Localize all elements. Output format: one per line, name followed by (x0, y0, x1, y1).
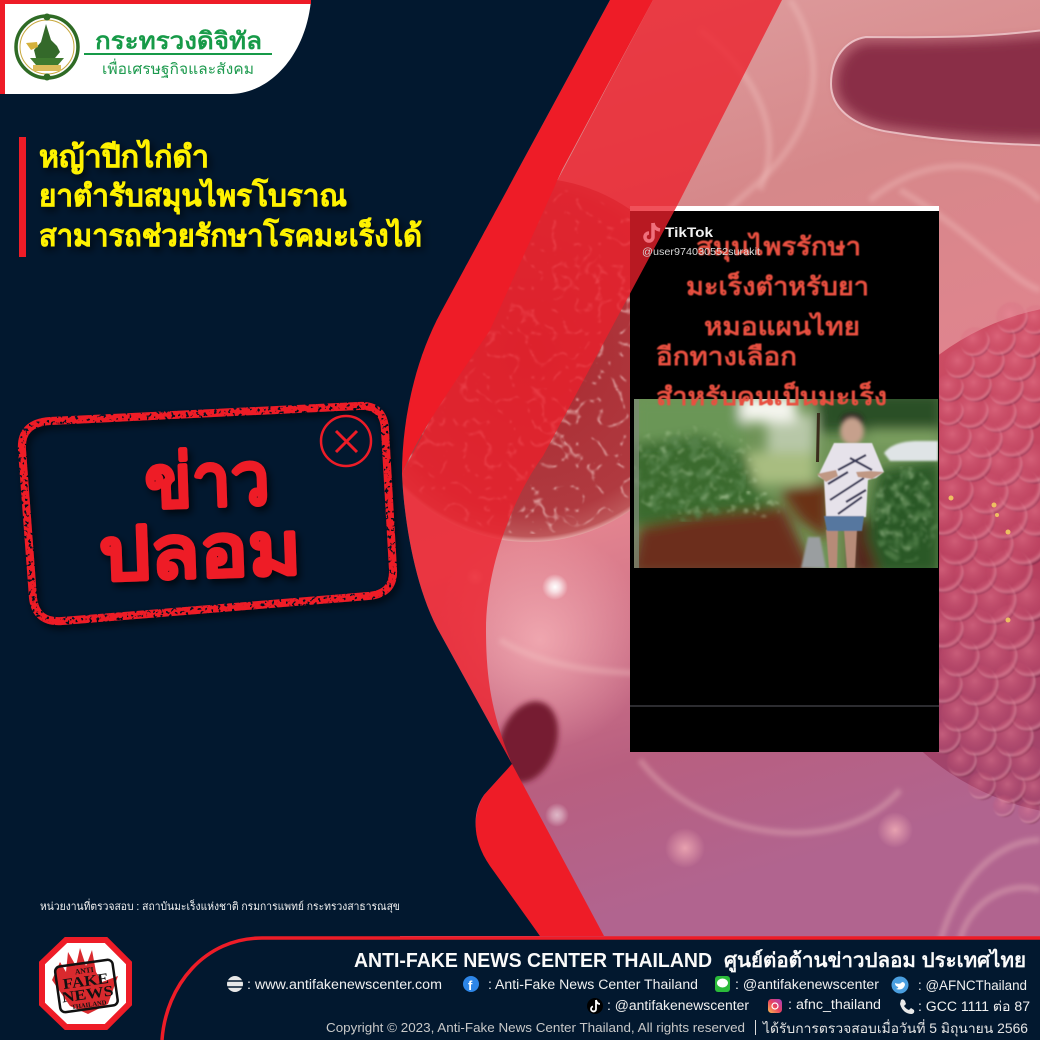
panel: TikTok post screenshot (620, 206, 943, 752)
icon: globe (227, 976, 243, 992)
icon: tiktok (587, 998, 603, 1014)
footer contact rows: : @antifakenewscenter (607, 998, 750, 1013)
TikTok watermark (642, 223, 760, 258)
footer contact rows: : www.antifakenewscenter.com (247, 977, 442, 992)
icon: facebook: f (468, 978, 473, 993)
dark side panel (0, 0, 610, 936)
post text: สมุนไพรรักษา (696, 231, 861, 263)
header logo panel: เพื่อเศรษฐกิจและสังคม (102, 58, 254, 78)
solid red band (402, 0, 653, 474)
footer contact rows (227, 976, 1030, 1014)
footer contact rows: : afnc_thailand (788, 997, 881, 1012)
leaf textures (620, 425, 939, 563)
icon: twitter (892, 976, 908, 994)
fake news stamp (22, 406, 393, 621)
header logo panel (0, 0, 311, 94)
footer red line (162, 938, 1040, 1040)
icon: instagram (768, 999, 782, 1013)
post text (656, 231, 887, 411)
headline: สามารถช่วยรักษาโรคมะเร็งได้ (39, 217, 422, 253)
icon: phone (900, 999, 914, 1014)
source note: หน่วยงานที่ตรวจสอบ : สถาบันมะเร็งแห่งชาติ กรมการแพทย์ กระทรวงสาธารณสุข (40, 898, 400, 913)
copyright row (326, 1019, 1028, 1037)
microscopic background image (352, 0, 1040, 1000)
icon: anti fake news logo: ANTI (74, 965, 94, 976)
bacillus top right (831, 28, 1040, 146)
TikTok watermark: TikTok (665, 225, 714, 240)
stamp text: ปลอม (98, 507, 302, 597)
stamp text: ข่าว (143, 437, 271, 524)
TikTok watermark: @user974030552surakit (642, 246, 760, 258)
icon: anti fake news logo: THAILAND (71, 999, 107, 1011)
copyright row: Copyright © 2023, Anti-Fake News Center Thailand, All rights reserved (326, 1021, 745, 1035)
bottom red shape (476, 764, 604, 936)
icon: anti fake news logo: FAKE (62, 971, 110, 993)
post text: มะเร็งตำหรับยา (686, 271, 869, 301)
big cell centre left (352, 178, 708, 542)
icon: facebook (463, 976, 479, 993)
headline: ยาตำรับสมุนไพรโบราณ (39, 177, 347, 215)
post text: หมอแผนไทย (704, 311, 860, 341)
light spots (466, 568, 913, 868)
stamp text (98, 437, 302, 597)
footer contact rows: : GCC 1111 ต่อ 87 (918, 999, 1030, 1014)
footer background (162, 938, 1040, 1040)
person (817, 413, 884, 568)
icon: x circle (321, 416, 371, 466)
DNA strands (500, 0, 1040, 1000)
headline (19, 137, 422, 257)
icon: anti fake news logo: NEWS (61, 983, 115, 1006)
icon: anti fake news logo (42, 940, 129, 1027)
translucent red band (402, 0, 782, 764)
stamp outline (22, 406, 393, 621)
photo: woman in garden (634, 399, 938, 568)
post text: สำหรับคนเป็นมะเร็ง (656, 381, 887, 411)
footer title: ANTI-FAKE NEWS CENTER THAILAND (354, 950, 712, 972)
dark bacillus (487, 693, 569, 791)
ministry name: กระทรวงดิจิทัล (95, 28, 262, 55)
big bumpy cell right (836, 302, 1040, 824)
icon: ministry emblem (16, 14, 78, 80)
footer title: ศูนย์ต่อต้านข่าวปลอม ประเทศไทย (724, 948, 1026, 974)
icon: line (715, 976, 730, 992)
headline: หญ้าปีกไก่ดำ (39, 139, 209, 175)
footer contact rows: : @antifakenewscenter (735, 977, 880, 992)
footer contact rows: : Anti-Fake News Center Thailand (488, 977, 698, 992)
post text: อีกทางเลือก (656, 343, 797, 371)
copyright row: ได้รับการตรวจสอบเมื่อวันที่ 5 มิถุนายน 2566 (762, 1019, 1028, 1037)
footer contact rows: : @AFNCThailand (918, 978, 1027, 993)
footer title (354, 948, 1026, 974)
